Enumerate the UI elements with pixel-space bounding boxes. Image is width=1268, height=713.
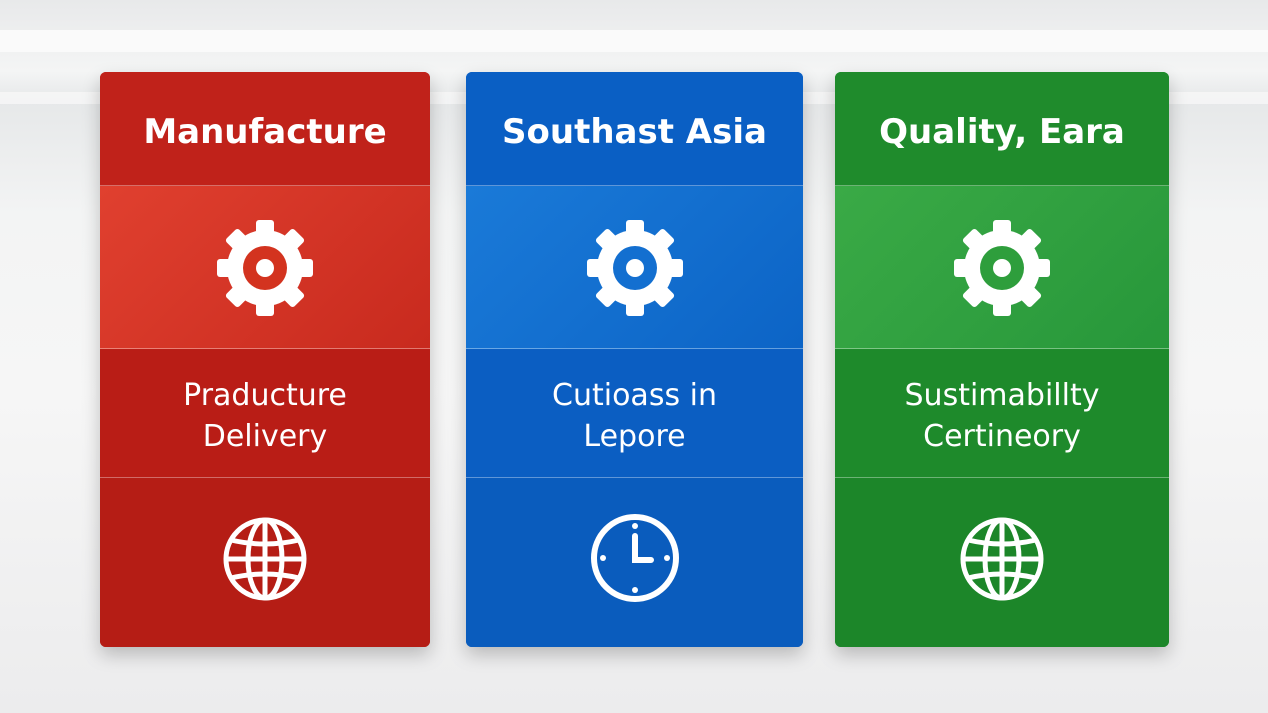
- text: Cutioass in Lepore: [466, 349, 803, 478]
- text: Praducture Delivery: Delivery: [203, 419, 327, 454]
- heading: Southast Asia: Southast Asia: [502, 112, 767, 152]
- icon: gear: [835, 186, 1169, 349]
- icon: clock: [466, 478, 803, 647]
- text: Sustimabillty Certineory: Certineory: [923, 419, 1081, 454]
- text: Praducture Delivery: Praducture: [183, 378, 347, 413]
- text: Cutioass in Lepore: Cutioass in: [552, 378, 717, 413]
- icon: gear: [466, 186, 803, 349]
- panel: southeast asia: [466, 72, 803, 647]
- heading: Manufacture: [100, 72, 430, 186]
- text: Praducture Delivery: [100, 349, 430, 478]
- heading: Quality, Eara: Quality, Eara: [879, 112, 1125, 152]
- heading: Southast Asia: [466, 72, 803, 186]
- text: Sustimabillty Certineory: [835, 349, 1169, 478]
- heading: Manufacture: Manufacture: [143, 112, 387, 152]
- panel: manufacture: [100, 72, 430, 647]
- icon: globe: [100, 478, 430, 647]
- icon: globe: [835, 478, 1169, 647]
- text: Sustimabillty Certineory: Sustimabillty: [905, 378, 1099, 413]
- panel: quality: [835, 72, 1169, 647]
- heading: Quality, Eara: [835, 72, 1169, 186]
- text: Cutioass in Lepore: Lepore: [583, 419, 686, 454]
- icon: gear: [100, 186, 430, 349]
